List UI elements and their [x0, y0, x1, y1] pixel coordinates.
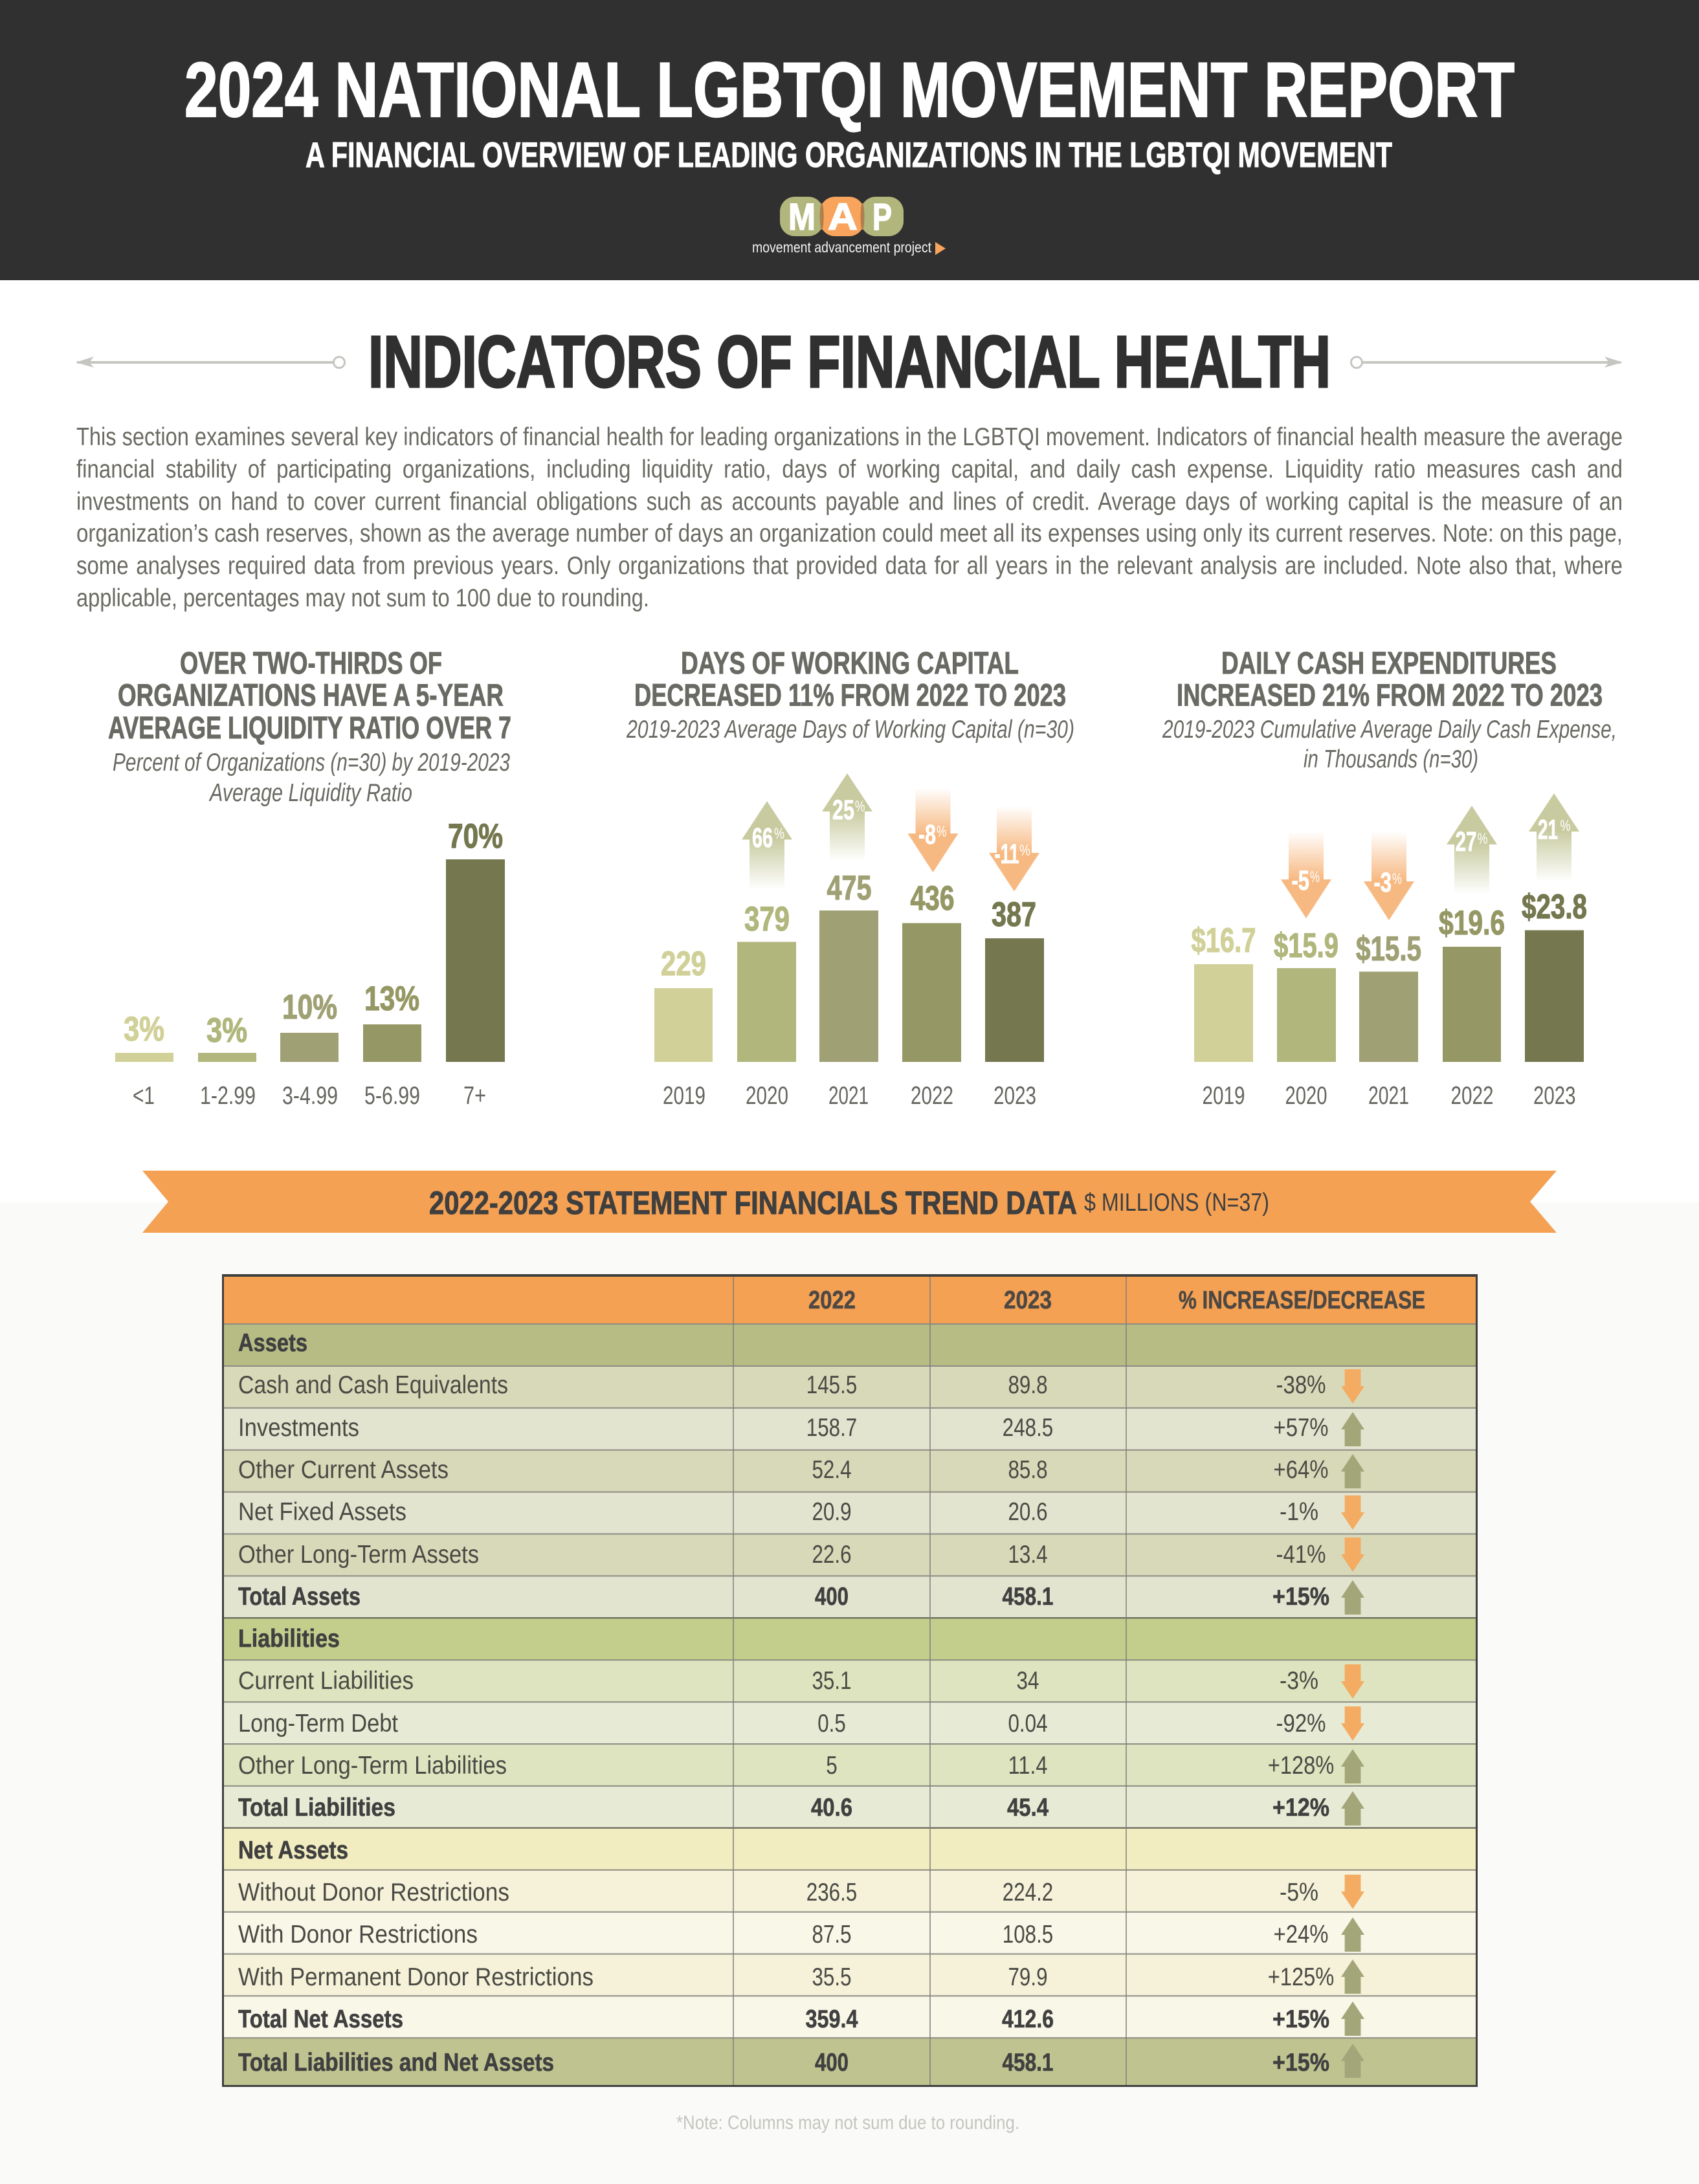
table section: liabilities: Current Liabilities — [238, 1667, 414, 1695]
arrow: down -11%: -11 — [994, 839, 1019, 870]
bar chart: working capital: 2020 — [746, 1082, 788, 1110]
table section: net assets: 87.5 — [812, 1921, 852, 1948]
table section: assets: Cash and Cash Equivalents — [238, 1371, 508, 1399]
bar chart: daily cash: $15.5 — [1356, 930, 1421, 968]
arrow: down -11% — [989, 806, 1039, 892]
table section: assets: +15% — [1272, 1583, 1329, 1611]
table section: assets: -1% — [1280, 1498, 1318, 1526]
intro paragraph: applicable, percentages may not sum to 100 due to rounding. — [76, 584, 649, 612]
table section: assets: Total Assets — [238, 1583, 361, 1611]
arrow: up 25% — [822, 773, 872, 861]
table section: assets: Assets — [238, 1329, 307, 1357]
arrow: up 27%: 27 — [1455, 826, 1477, 857]
panel: days of working capital chart — [626, 646, 1074, 1110]
arrow: up 66%: % — [774, 825, 784, 843]
table total row: 400 — [815, 2049, 849, 2077]
bar chart: daily cash: $16.7 — [1191, 921, 1256, 960]
heading: liquidity: ORGANIZATIONS HAVE A 5-YEAR — [118, 678, 504, 713]
table section: assets: Other Long-Term Assets — [238, 1541, 479, 1569]
table section: net assets: Total Net Assets — [238, 2005, 403, 2033]
table section: liabilities: 0.5 — [817, 1710, 846, 1737]
table section: liabilities: Long-Term Debt — [238, 1710, 398, 1737]
table section: assets: 20.9 — [812, 1498, 852, 1526]
bar chart: liquidity ratio — [115, 817, 505, 1110]
table section: liabilities: Other Long-Term Liabilities — [238, 1752, 507, 1780]
table section: liabilities — [222, 1618, 1477, 1828]
table section: liabilities: +128% — [1268, 1752, 1334, 1780]
bar chart: liquidity ratio: <1 — [133, 1082, 155, 1110]
bar chart: daily cash: 2021 — [1368, 1082, 1409, 1110]
table section: liabilities: 34 — [1016, 1667, 1039, 1695]
bar chart: working capital: 229 — [661, 945, 706, 983]
table section: assets: Other Current Assets — [238, 1456, 449, 1484]
table section: assets: +64% — [1274, 1456, 1328, 1484]
table section: liabilities: +12% — [1272, 1794, 1329, 1822]
banner: statement financials — [142, 1171, 1557, 1233]
bar chart: working capital — [654, 869, 1044, 1110]
logo: MAP: P — [872, 196, 892, 238]
logo: MAP: A — [828, 196, 858, 238]
bar chart: liquidity ratio: 5-6.99 — [364, 1082, 420, 1110]
table section: assets: 89.8 — [1008, 1371, 1047, 1399]
table section: liabilities: 5 — [826, 1752, 838, 1780]
intro paragraph — [76, 423, 1623, 612]
table section: liabilities: -92% — [1276, 1710, 1326, 1737]
bar chart: working capital: 2021 — [828, 1082, 869, 1110]
table section: assets: 52.4 — [812, 1456, 852, 1484]
arrow: up 21% — [1529, 793, 1579, 882]
bar chart: liquidity ratio: 7+ — [463, 1082, 486, 1110]
arrow: down -5%: % — [1310, 868, 1320, 886]
arrow: down -3% — [1364, 832, 1414, 920]
arrow: down -3%: -3 — [1373, 867, 1392, 898]
heading: daily cash: DAILY CASH EXPENDITURES — [1221, 646, 1557, 681]
table total row — [222, 2038, 1477, 2085]
table header row: 2022 — [808, 1286, 856, 1314]
arrow: down -8%: -8 — [918, 819, 936, 850]
bar chart: liquidity ratio: 70% — [448, 817, 503, 855]
table section: net assets: 79.9 — [1008, 1963, 1047, 1991]
trend arrows column — [1341, 1369, 1364, 2078]
table section: assets: 13.4 — [1008, 1541, 1047, 1569]
bar chart: liquidity ratio: 13% — [364, 980, 419, 1018]
table section: assets: 22.6 — [812, 1541, 852, 1569]
table section: assets: 458.1 — [1002, 1583, 1054, 1611]
table section: assets: -38% — [1276, 1371, 1326, 1399]
table section: assets: -41% — [1276, 1541, 1326, 1569]
table header row — [222, 1275, 1477, 1324]
table section: net assets: +125% — [1268, 1963, 1334, 1991]
footnote: *Note: Columns may not sum due to rounding. — [676, 2112, 1019, 2134]
table section: liabilities: 0.04 — [1008, 1710, 1047, 1737]
table total row: +15% — [1272, 2049, 1329, 2077]
table header row: 2023 — [1004, 1286, 1052, 1314]
heading: liquidity: Percent of Organizations (n=30) by 2019-2023 — [113, 749, 510, 777]
table section: net assets: +24% — [1274, 1921, 1328, 1948]
bar chart: liquidity ratio: 1-2.99 — [200, 1082, 256, 1110]
bar chart: liquidity ratio: 10% — [282, 988, 337, 1026]
table section: net assets: 108.5 — [1003, 1921, 1053, 1948]
bar chart: daily cash: $15.9 — [1274, 927, 1338, 965]
table header row: % INCREASE/DECREASE — [1179, 1286, 1425, 1314]
bar chart: daily cash: 2019 — [1203, 1082, 1245, 1110]
bar chart: liquidity ratio: 3% — [124, 1010, 164, 1048]
logo: MAP — [752, 196, 946, 256]
section heading with arrows: INDICATORS OF FINANCIAL HEALTH — [368, 321, 1331, 403]
logo: MAP: movement advancement project — [752, 239, 932, 256]
bar chart: liquidity ratio: 3% — [206, 1011, 247, 1050]
table section: assets — [222, 1324, 1477, 1618]
bar chart: daily cash: $23.8 — [1522, 888, 1587, 926]
heading: liquidity: OVER TWO-THIRDS OF — [180, 646, 442, 681]
table section: assets: 85.8 — [1008, 1456, 1047, 1484]
bar chart: working capital: 2023 — [994, 1082, 1036, 1110]
arrow: up 27% — [1447, 806, 1497, 894]
arrow: down -11%: % — [1019, 842, 1030, 859]
header band — [0, 0, 1699, 280]
table section: assets: 158.7 — [806, 1414, 857, 1442]
bar chart: working capital: 2019 — [663, 1082, 705, 1110]
bar chart: working capital: 2022 — [911, 1082, 953, 1110]
heading: liquidity: AVERAGE LIQUIDITY RATIO OVER 7 — [108, 711, 511, 745]
logo: MAP: M — [788, 196, 816, 238]
table section: liabilities: 45.4 — [1007, 1794, 1049, 1822]
table section: net assets: With Permanent Donor Restrictions — [238, 1963, 594, 1991]
panel: daily cash expenditures chart — [1162, 646, 1617, 1110]
heading: daily cash — [1162, 646, 1617, 773]
table section: assets: 145.5 — [806, 1371, 857, 1399]
bar chart: daily cash: $19.6 — [1439, 904, 1505, 942]
bar chart: daily cash: 2022 — [1451, 1082, 1494, 1110]
bar chart: liquidity ratio: 3-4.99 — [282, 1082, 338, 1110]
heading: working capital: DAYS OF WORKING CAPITAL — [681, 646, 1019, 681]
table section: liabilities: 11.4 — [1008, 1752, 1047, 1780]
heading: liquidity: Average Liquidity Ratio — [208, 779, 412, 807]
table: financial trend data — [222, 1274, 1478, 2087]
banner: statement financials: $ MILLIONS (N=37) — [1084, 1189, 1269, 1217]
table total row: 458.1 — [1002, 2049, 1054, 2077]
table section: net assets: 359.4 — [805, 2005, 858, 2033]
arrow: up 66% — [742, 801, 792, 890]
arrow: up 27%: % — [1477, 830, 1487, 848]
heading: working capital — [626, 646, 1074, 744]
bar chart: working capital: 387 — [992, 896, 1036, 934]
table section: net assets: Without Donor Restrictions — [238, 1879, 509, 1906]
table section: net assets: 35.5 — [812, 1963, 852, 1991]
table section: net assets: +15% — [1272, 2005, 1329, 2033]
table section: liabilities: 40.6 — [811, 1794, 852, 1822]
bar chart: daily cash: 2023 — [1533, 1082, 1575, 1110]
arrow: up 21%: % — [1560, 817, 1570, 835]
table section: assets: 20.6 — [1008, 1498, 1047, 1526]
table section: assets: Net Fixed Assets — [238, 1498, 406, 1526]
arrow: up 25%: % — [855, 798, 865, 815]
table section: net assets: Net Assets — [238, 1837, 348, 1864]
table section: liabilities: -3% — [1280, 1667, 1318, 1695]
bar chart: working capital: 379 — [744, 900, 790, 938]
arrow: up 21%: 21 — [1538, 814, 1558, 845]
table section: net assets: 236.5 — [806, 1879, 857, 1906]
arrow: down -8% — [907, 788, 958, 872]
heading: liquidity — [108, 646, 511, 807]
arrow: down -5% — [1281, 832, 1331, 918]
table section: net assets — [222, 1828, 1477, 2038]
arrow: down -8%: % — [937, 823, 946, 841]
bar chart: working capital: 436 — [910, 879, 954, 918]
arrow: down -5%: -5 — [1292, 865, 1309, 896]
table section: net assets: With Donor Restrictions — [238, 1921, 478, 1948]
table section: assets: +57% — [1274, 1414, 1328, 1442]
heading: working capital: 2019-2023 Average Days of Working Capital (n=30) — [626, 716, 1074, 744]
table section: liabilities: Total Liabilities — [238, 1794, 395, 1822]
table section: assets: 248.5 — [1003, 1414, 1053, 1442]
table section: liabilities: 35.1 — [812, 1667, 852, 1695]
bar chart: working capital: 475 — [827, 869, 871, 907]
arrow: up 25%: 25 — [832, 795, 854, 826]
bar chart: daily cash: 2020 — [1285, 1082, 1327, 1110]
bar chart: daily cash — [1191, 888, 1587, 1110]
table section: net assets: -5% — [1280, 1879, 1318, 1906]
table section: liabilities: Liabilities — [238, 1625, 340, 1653]
panel: liquidity ratio chart — [108, 646, 511, 1110]
table section: net assets: 224.2 — [1003, 1879, 1053, 1906]
table total row: Total Liabilities and Net Assets — [238, 2049, 554, 2077]
table section: assets: 400 — [815, 1583, 849, 1611]
arrow: down -3%: % — [1392, 870, 1402, 888]
table section: net assets: 412.6 — [1002, 2005, 1054, 2033]
heading: daily cash: in Thousands (n=30) — [1304, 745, 1478, 773]
table section: assets: Investments — [238, 1414, 359, 1442]
heading: working capital: DECREASED 11% FROM 2022 TO 2023 — [634, 678, 1066, 713]
page background: lower section — [0, 1202, 1699, 2184]
arrow: up 66%: 66 — [752, 822, 773, 854]
banner: statement financials: 2022-2023 STATEMENT FINANCIALS TREND DATA — [429, 1185, 1077, 1221]
